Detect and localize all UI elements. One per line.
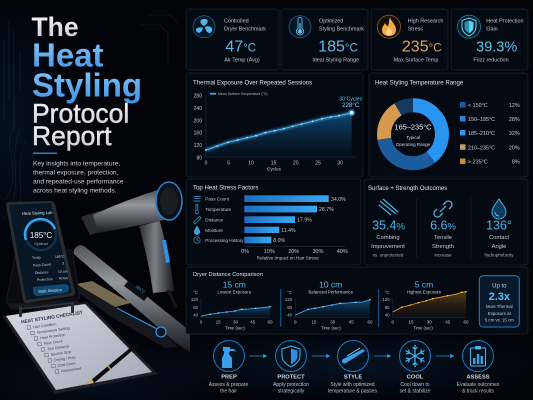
mini chart: 15 cm: Lowest Exposure [217,289,252,294]
line chart: Cycles [267,167,282,172]
step: prep [209,340,248,395]
mini chart: 10 cm: 0 [294,320,297,325]
line chart [194,92,362,172]
checklist items: Section Size [50,350,71,357]
illustration: phone on stand: Heat Styling Lab [22,210,53,216]
step: style: temperature & passes [328,389,377,395]
illustration: flat iron: 185°C [134,284,146,294]
mini chart: 5 cm: 0 [391,320,394,325]
legend: 32% [509,131,520,137]
mini chart: 5 cm: 15 [408,320,414,325]
panel: thermal exposure line chart: Thermal Exposure Over Repeated Sessions [193,80,312,87]
legend: 20% [509,145,520,151]
stat card: styling benchmark: 185°C [318,39,358,56]
stat card: heat protection: Gain [486,26,498,32]
line chart: 5 [227,160,230,166]
step: cool: set & stabilize [400,389,431,395]
stat card: research stress: Max Surface Temp [394,58,438,64]
panel: thermal exposure line chart [186,73,363,177]
line chart: 30 [337,160,343,166]
horizontal bar chart: 34.0% [331,197,346,203]
stat card: styling benchmark [281,9,368,70]
legend: 150–185°C [468,117,495,123]
panel: temperature range donut: Heat Styling Temperature Range [375,80,464,87]
legend: 8% [512,160,520,166]
line chart: 10 [248,160,254,166]
metric: contact angle: Contact [489,235,509,241]
mini chart: 15 cm: 80 [193,305,199,310]
callout: 2.3x more exposure: Exposure at [488,311,512,316]
title: Styling [32,66,142,104]
mini chart: 10 cm: 120 [285,297,293,302]
step: protect [273,340,309,395]
title: Protocol [32,99,129,129]
intro text: Key insights into temperature, [33,160,120,168]
step: cool [400,340,431,395]
metric: combing improvement: Improvement [371,244,405,250]
factor labels: Processing History [205,238,244,243]
title: Heat [32,37,104,74]
stat card: styling benchmark: Ideal Styling Range [312,58,359,64]
panel: temperature range donut [369,73,528,177]
step: assess: & track results [462,389,494,395]
metric: contact angle [484,199,514,258]
step: style: Style with optimized [330,382,375,388]
legend: < 150°C [468,103,488,109]
illustration: phone on stand: 185°C [55,254,65,259]
metric: tensile strength: Strength [432,244,454,250]
mini chart: 15 cm: 40 [193,312,199,318]
metric: contact angle: 136° [486,219,512,233]
step: style: STYLE [344,375,362,381]
phone gauge: 185°C [30,231,52,240]
title underline [33,153,57,154]
stat card: heat protection [451,9,528,70]
pen [85,343,139,385]
icon: flame [378,15,400,38]
intro text: thermal exposure, protection, [33,170,119,176]
icon: snowflake [406,345,424,367]
stat card: research stress: High Research [408,18,443,24]
horizontal bar chart: 10% [264,249,275,255]
mini chart: 10 cm: 15 [311,320,317,325]
metric: tensile strength: 6.6% [430,219,456,233]
callout: 2.3x more exposure: 2.3x [489,291,511,303]
panel: top heat stress factors: Top Heat Stress Factors [193,185,258,192]
mini chart: 15 cm: 60 [267,320,273,325]
panel: dryer distance comparison: Dryer Distance Comparison [193,272,263,278]
title [32,12,142,151]
mini chart: 5 cm: 5 cm [415,279,433,289]
step: prep: PREP [221,375,237,381]
arrow [249,354,266,358]
horizontal bar chart: 11.4% [281,228,296,234]
line chart: 200 [194,118,202,124]
mini chart: 10 cm: 60 [367,320,373,325]
donut chart [384,105,442,163]
callout: 2.3x more exposure [479,276,519,327]
step: protect: PROTECT [277,375,305,381]
line chart: Mean Surface Temperature (°C) [218,92,268,96]
step: prep: the hair [220,389,237,395]
legend: 210–235°C [468,145,495,151]
phone gauge [25,219,56,250]
factor labels: Temperature [205,207,232,212]
mini chart: 15 cm: 120 [191,297,199,302]
checklist items: Pass Count [43,339,63,346]
illustration: phone on stand: 10 cm [58,270,68,274]
intro text [33,160,124,194]
arrow [312,354,330,358]
stat card: dryer benchmark: Dryer Benchmark [224,26,266,32]
icon: flat iron [342,348,365,364]
illustration: checklist clipboard: HEAT STYLING CHECKLIST [21,310,83,324]
mini chart: 5 cm: 40 [385,312,390,318]
legend [460,102,520,166]
horizontal bar chart: 0% [241,249,249,255]
horizontal bar chart: 40% [337,249,348,255]
mini chart: 10 cm: 40 [287,312,293,318]
illustration: phone on stand: Temp [32,256,41,260]
intro text: across heat styling methods. [33,188,117,194]
mini chart: 10 cm: 45 [349,320,354,325]
illustration: phone on stand: Active [59,276,69,280]
mini chart: 10 cm: 30 [330,320,336,325]
mini chart: 15 cm [191,279,273,331]
factor labels: Pass Count [205,197,230,202]
checklist items: Drying / Prep [54,355,76,362]
mini chart: 5 cm: 120 [382,297,390,302]
callout: 2.3x more exposure: More Thermal [486,304,513,309]
horizontal bar chart: 20% [288,249,299,255]
line chart: 20 [293,160,299,166]
mini chart: 5 cm: °C [385,290,390,295]
legend: > 235°C [468,160,488,166]
panel: surface and strength outcomes [364,179,528,265]
stat card: styling benchmark: Optimized [319,18,343,24]
arrow [436,354,454,358]
mini chart: 5 cm: 30 [427,320,432,325]
illustration: phone on stand: Start Session [38,287,62,294]
mini chart: 15 cm: 30 [233,320,238,325]
illustration: phone on stand: Protection [37,277,53,282]
title: The [32,12,79,42]
panel: dryer distance comparison [186,267,528,334]
panel: surface and strength outcomes: Surface + Strength Outcomes [368,186,447,192]
icon: shield [458,15,480,38]
mini chart: 5 cm: Highest Exposure [407,289,442,294]
icon: thermometer [289,16,311,38]
mini chart: 15 cm: 0 [200,320,203,325]
phone gauge: Optimal [34,241,48,246]
illustration: checklist clipboard [2,302,158,394]
factor labels [205,197,244,243]
step: assess: ASSESS [466,375,490,381]
metric: combing improvement: vs. unprotected [373,253,404,258]
line chart: 120 [194,143,202,149]
stat card: heat protection: Frizz reduction [473,58,509,64]
icon: shield [282,346,300,367]
stat card: dryer benchmark: Controlled [224,18,249,24]
intro text: and repeated-use performance [33,178,124,186]
horizontal bar chart: 28.7% [319,207,334,213]
icon: fan [193,16,215,38]
panel: temperature range donut: 165–235°C [394,122,432,131]
illustration: phone on stand: 3 [62,262,64,266]
stat card: research stress: 235°C [402,39,442,56]
line chart: 0 [205,160,208,166]
step: cool: Cool down to [400,382,430,388]
line chart: 240 [194,106,202,112]
metric: combing improvement [371,199,405,258]
mini chart: 15 cm: Time (sec) [225,326,245,331]
mini chart: 5 cm [382,279,469,331]
checklist items: Temperature Setting [36,326,70,335]
mini chart: 15 cm: 45 [250,320,256,325]
stat card: dryer benchmark [186,9,279,70]
step: protect: Apply protection [273,382,309,388]
panel: top heat stress factors [186,179,361,265]
line chart: 15 [271,160,276,166]
legend: 185–210°C [468,131,495,137]
legend: 28% [509,117,520,123]
illustration: phone on stand: Distance [35,270,49,275]
metric: tensile strength: increase [434,253,452,258]
stat card: heat protection: 39.3% [476,40,517,56]
step: assess: Evaluate outcomes [457,382,500,388]
step: prep: Assess & prepare [209,382,248,388]
metric: combing improvement: 35.4% [372,219,405,233]
step: protect: strategically [278,389,305,395]
stat card: research stress: Stress [408,26,423,32]
factor labels: Distance [205,218,224,222]
line chart: 25 [315,160,321,166]
checklist items: Cool Down [57,361,76,368]
icon: spray bottle [222,347,236,368]
title: Report [32,121,112,151]
horizontal bar chart: 8.0% [273,238,286,244]
line chart: 30 Cycles [339,96,362,102]
stat card: styling benchmark: Styling Benchmark [319,26,364,32]
step: cool: COOL [407,375,424,381]
step: assess [457,340,500,395]
mini chart: 5 cm: Time (sec) [413,326,433,331]
callout: 2.3x more exposure: 5 cm vs. 15 cm [485,318,514,322]
stat card: heat protection: Heat Protection [486,18,523,24]
metric: tensile strength [430,201,456,258]
metric: tensile strength: Tensile [434,235,452,241]
mini chart: 10 cm: Balanced Performance [308,289,354,294]
stat card: research stress [371,9,448,70]
line chart: 160 [194,131,202,137]
illustration: flat iron [74,245,190,352]
mini chart: 15 cm: 15 [216,320,221,325]
stat card: dryer benchmark: 47°C [225,39,256,56]
step: style [328,340,377,395]
line chart: 280 [194,94,202,100]
mini chart: 5 cm: 45 [445,320,451,325]
checklist items: Tool Distance [47,344,69,351]
checklist items: Hair Condition [33,322,57,329]
checklist items [27,322,81,374]
horizontal bar chart: 30% [312,249,324,255]
mini chart: 5 cm: 60 [463,320,469,325]
metric: combing improvement: Combing [376,235,400,241]
factor icons [194,196,201,243]
panel: temperature range donut: Operating Range [396,142,431,147]
line chart: 80 [196,156,202,162]
metric: contact angle: Angle [492,244,506,250]
stat card: dryer benchmark: Air Temp (Avg) [224,58,260,64]
illustration: phone on stand [6,201,80,310]
mini chart: 15 cm: 15 cm [223,279,246,289]
mini chart: 10 cm: Time (sec) [321,326,341,331]
panel: temperature range donut: Typical [406,135,420,140]
horizontal bar chart: Relative Impact on Hair Stress [257,256,319,261]
process flow [209,340,500,395]
legend: 12% [509,103,520,109]
line chart: 228°C [342,102,360,109]
horizontal bar chart [241,195,348,261]
mini chart: 10 cm: 80 [287,305,293,310]
illustration: phone on stand: Pass Count [33,263,51,267]
checklist items: Heat Protection [40,333,66,340]
mini chart: 10 cm: 10 cm [319,279,342,289]
horizontal bar chart: 17.9% [297,218,312,224]
metric: contact angle: hydrophobicity [484,253,514,258]
callout: 2.3x more exposure: Up to [492,284,507,290]
factor labels: Moisture [205,228,223,233]
icon: clipboard chart [470,346,486,366]
mini chart: 10 cm [285,279,373,331]
mini chart: 5 cm: 80 [385,305,390,310]
mini chart: 15 cm: °C [193,290,198,295]
arrow [374,354,390,358]
checklist items: Assessment [61,367,81,373]
mini chart: 10 cm: °C [287,290,292,295]
illustration: hair dryer [81,182,182,308]
